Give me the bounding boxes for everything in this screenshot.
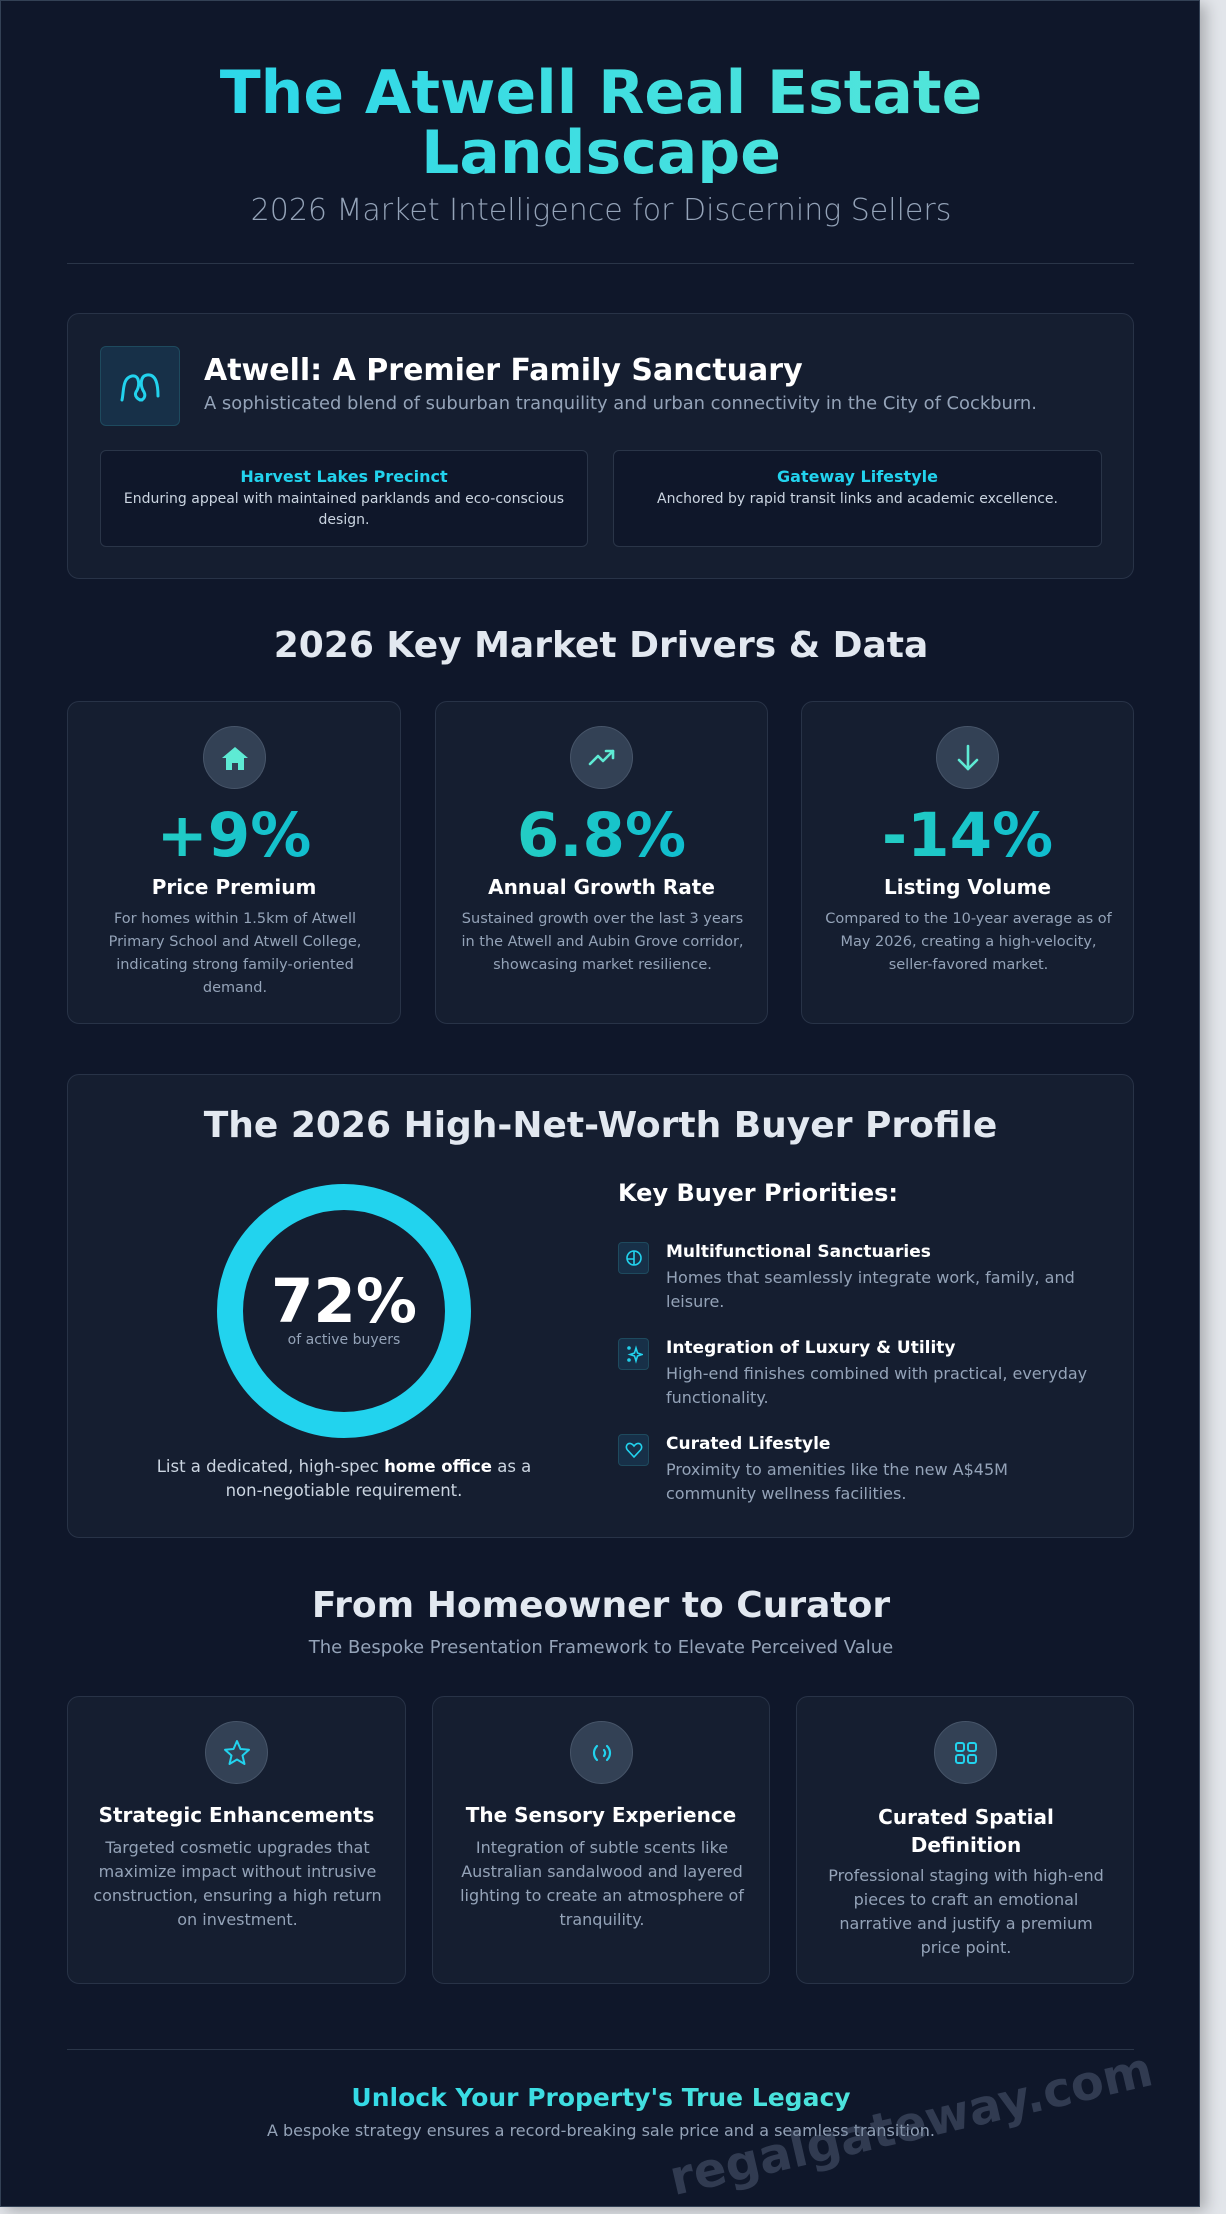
- donut chart: 72%: [271, 1266, 417, 1337]
- heading: Atwell: A Premier Family Sanctuary: [204, 353, 803, 388]
- stat card: growth: [435, 701, 768, 1024]
- title: [1, 63, 1201, 183]
- stat card: growth: 6.8%: [517, 800, 686, 871]
- stat card: price premium: Price Premium: [152, 875, 316, 899]
- priority 2: Integration of Luxury & Utility: [666, 1338, 956, 1358]
- card: strategic enhancements: Strategic Enhancements: [99, 1803, 374, 1827]
- heading: The 2026 High-Net-Worth Buyer Profile: [204, 1105, 997, 1146]
- card: sensory experience: The Sensory Experience: [466, 1803, 736, 1827]
- description: A sophisticated blend of suburban tranquility and urban connectivity in the City of Cockburn.: [204, 393, 1037, 414]
- card: spatial definition: [796, 1696, 1134, 1984]
- heading: priorities: Key Buyer Priorities:: [618, 1179, 898, 1207]
- stat card: listing volume: [801, 701, 1134, 1024]
- panel: buyer profile: [67, 1074, 1134, 1538]
- heading: homeowner to curator: From Homeowner to Curator: [312, 1585, 890, 1626]
- card: Harvest Lakes: [100, 450, 588, 547]
- card: strategic enhancements: Targeted cosmetic upgrades that maximize impact without intrusive construction, ensuring a high return on investment.: [93, 1838, 382, 1929]
- card: Harvest Lakes: Harvest Lakes Precinct: [240, 467, 448, 486]
- priority 3: Proximity to amenities like the new A$45M community wellness facilities.: [666, 1460, 1008, 1503]
- icon: sparkle: [618, 1338, 649, 1370]
- priority 2: [618, 1338, 1087, 1407]
- footer text: A bespoke strategy ensures a record-breaking sale price and a seamless transition.: [267, 2121, 935, 2140]
- watermark: regalgateway.com: [664, 2041, 1158, 2207]
- stat card: price premium: For homes within 1.5km of Atwell Primary School and Atwell College, indicating strong family-oriented demand.: [109, 911, 361, 996]
- stat card: growth: Annual Growth Rate: [488, 875, 715, 899]
- priority 3: [618, 1434, 1008, 1503]
- card: Gateway Lifestyle: Anchored by rapid transit links and academic excellence.: [657, 491, 1058, 507]
- stat card: listing volume: Compared to the 10-year average as of May 2026, creating a high-velocity, seller-favored market.: [825, 911, 1112, 973]
- panel: Atwell intro: [67, 313, 1134, 579]
- stat card: listing volume: -14%: [882, 800, 1053, 871]
- subheading: The Bespoke Presentation Framework to Elevate Perceived Value: [309, 1637, 893, 1658]
- donut chart: of active buyers: [288, 1332, 400, 1348]
- stat card: price premium: [67, 701, 401, 1024]
- stat card: price premium: +9%: [157, 800, 311, 871]
- icon: sanctuary: [618, 1242, 649, 1274]
- card: sensory experience: [432, 1696, 770, 1984]
- subtitle: 2026 Market Intelligence for Discerning Sellers: [251, 193, 951, 228]
- card: Gateway Lifestyle: Gateway Lifestyle: [777, 467, 938, 486]
- card: Harvest Lakes: Enduring appeal with maintained parklands and eco-conscious design.: [124, 491, 564, 528]
- footer title: [1, 2083, 1201, 2112]
- donut chart: [217, 1184, 471, 1438]
- icon: trend up: [570, 726, 633, 789]
- icon: grid: [934, 1721, 997, 1784]
- card: spatial definition: Curated Spatial Definition: [878, 1805, 1054, 1857]
- icon: family: [100, 346, 180, 426]
- stat card: growth: Sustained growth over the last 3 years in the Atwell and Aubin Grove corridor, showcasing market resilience.: [461, 911, 744, 973]
- icon: heart: [618, 1434, 649, 1466]
- icon: arrow down: [936, 726, 999, 789]
- stat card: listing volume: Listing Volume: [884, 875, 1051, 899]
- card: sensory experience: Integration of subtle scents like Australian sandalwood and layered lighting to create an atmosphere of tranquility.: [460, 1838, 744, 1929]
- heading: market drivers: 2026 Key Market Drivers & Data: [274, 625, 928, 666]
- title: The Atwell Real Estate: [220, 58, 982, 128]
- priority 3: Curated Lifestyle: [666, 1434, 830, 1454]
- caption: List a dedicated, high-spec home office as a non-negotiable requirement.: [157, 1457, 531, 1500]
- priority 2: High-end finishes combined with practical, everyday functionality.: [666, 1364, 1087, 1407]
- priority 1: [618, 1242, 1075, 1311]
- card: strategic enhancements: [67, 1696, 406, 1984]
- title: Landscape: [421, 118, 781, 188]
- icon: house: [203, 726, 266, 789]
- icon: star: [205, 1721, 268, 1784]
- priority 1: Multifunctional Sanctuaries: [666, 1242, 931, 1262]
- card: Gateway Lifestyle: [613, 450, 1102, 547]
- icon: waves: [570, 1721, 633, 1784]
- card: spatial definition: Professional staging with high-end pieces to craft an emotional narrative and justify a premium price point.: [828, 1866, 1104, 1957]
- footer title: Unlock Your Property's True Legacy: [351, 2083, 851, 2112]
- priority 1: Homes that seamlessly integrate work, family, and leisure.: [666, 1268, 1075, 1311]
